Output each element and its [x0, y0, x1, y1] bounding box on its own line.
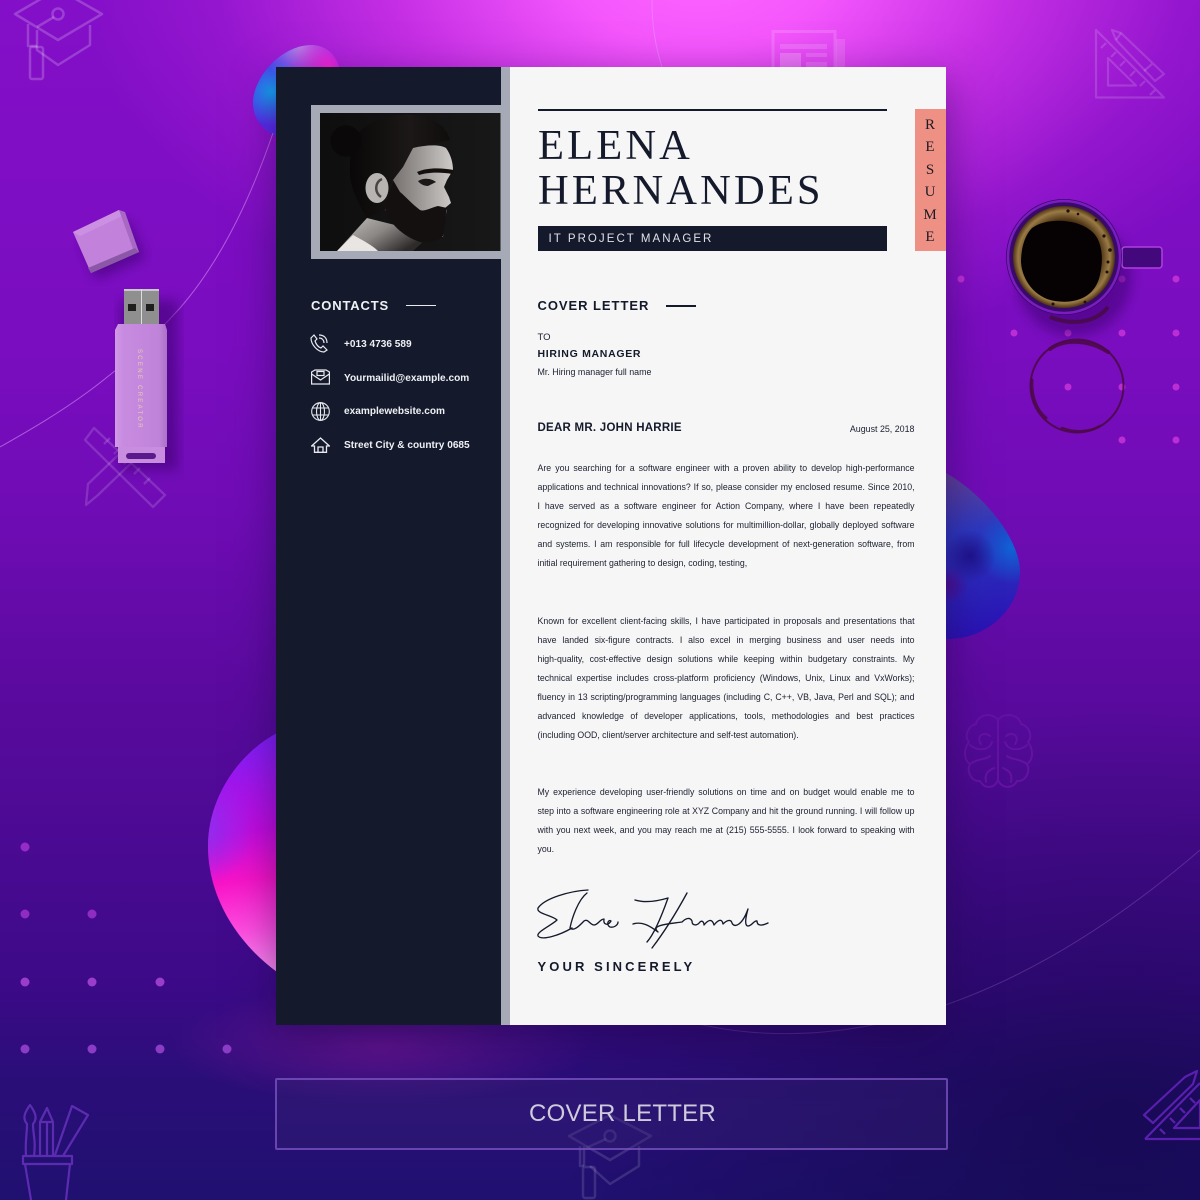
- resume vertical tab: U: [925, 184, 935, 200]
- recipient block: [538, 332, 651, 377]
- contact: address: Street City & country 0685: [344, 440, 470, 451]
- resume vertical tab: E: [925, 229, 935, 245]
- brow and eye: [417, 168, 454, 175]
- resume vertical tab: R: [925, 117, 935, 133]
- contact: phone: [310, 334, 412, 353]
- resume vertical tab: M: [923, 207, 937, 223]
- job title bar: IT PROJECT MANAGER: [548, 233, 713, 245]
- signature: [537, 889, 769, 949]
- letter paragraph 1: I have served as a software engineer for Action Company, where I have been repeatedly: [538, 500, 914, 510]
- icon: graduation cap bottom center: [569, 1115, 651, 1198]
- bottom caption box: COVER LETTER: [529, 1100, 716, 1127]
- face: [385, 145, 453, 237]
- icon: crossed ruler and pencil: [85, 428, 165, 507]
- contact: website: examplewebsite.com: [344, 406, 445, 417]
- contact: phone: +013 4736 589: [344, 339, 412, 350]
- recipient block: Mr. Hiring manager full name: [538, 367, 651, 377]
- hair: [350, 114, 450, 218]
- recipient block: TO: [538, 332, 551, 343]
- letter paragraph 2: fluency in 13 scripting/programming languages (including C, C++, VB, Java, Perl and SQL); and: [538, 692, 914, 702]
- letter paragraph 3: My experience developing user-friendly solutions on time and on budget would enable me to: [538, 786, 914, 796]
- letter paragraph 1: applications and technical innovations? If so, please consider my enclosed resume. Since 2010,: [538, 482, 914, 492]
- dots: right: [958, 276, 1180, 444]
- resume vertical tab: S: [926, 162, 934, 178]
- name heading: ELENA: [538, 122, 693, 169]
- icon: pencil cup bottom left: [23, 1105, 88, 1200]
- letter paragraph 3: step into a software engineering role at XYZ Company and hit the ground running. I will follow up: [538, 806, 914, 816]
- coffee ring stain: [1030, 340, 1124, 432]
- salutation: DEAR MR. JOHN HARRIE: [538, 422, 682, 434]
- letter paragraph 3: you.: [538, 844, 554, 854]
- contact: address: [311, 437, 470, 453]
- job title bar: [538, 226, 887, 251]
- letter paragraph 2: technical expertise includes cross-platform proficiency (Windows, Unix, Linux and VxWorks);: [538, 672, 914, 682]
- contact: website: [311, 402, 445, 421]
- letter paragraph 1: initial requirement gathering to design, coding, testing,: [538, 558, 747, 568]
- letter paragraph 1: [538, 462, 914, 568]
- date: August 25, 2018: [850, 424, 914, 434]
- header top rule: [538, 109, 887, 111]
- bottom caption box: [275, 1078, 948, 1150]
- letter paragraph 1: recognized for developing innovative solutions for multimillion-dollar, globally deployed software: [538, 520, 914, 530]
- blob: right: [946, 473, 1020, 639]
- name heading: HERNANDES: [538, 167, 824, 214]
- resume vertical tab: [915, 109, 946, 251]
- resume vertical tab: E: [925, 139, 935, 155]
- contact: email: [311, 369, 469, 385]
- letter paragraph 2: have landed six-figure contracts. I also excel in merging business and user needs into: [538, 634, 914, 644]
- letter paragraph 1: Are you searching for a software engineer with a proven ability to develop high-performance: [538, 462, 914, 472]
- icon: graduation cap top left: [15, 0, 102, 79]
- cover letter heading rule: [666, 305, 696, 306]
- letter paragraph 2: Known for excellent client-facing skills, I have participated in proposals and presentations that: [538, 616, 914, 626]
- letter paragraph 2: high-quality, cost-effective design solutions while keeping within budgetary constraints. My: [538, 654, 914, 664]
- recipient block: HIRING MANAGER: [538, 348, 641, 360]
- neck: [337, 218, 425, 251]
- letter paragraph 2: [538, 616, 914, 740]
- resume document shadow: [276, 67, 946, 1025]
- cover letter heading: COVER LETTER: [538, 298, 649, 313]
- portrait photo with frame: [311, 105, 501, 259]
- letter paragraph 3: [538, 786, 914, 854]
- contact: email: Yourmailid@example.com: [344, 373, 469, 384]
- panel: grey divider stripe: [501, 67, 510, 1025]
- letter paragraph 1: and systems. I am responsible for full lifecycle development of next-generation software, from: [538, 538, 914, 548]
- usb label: SCENE CREATOR: [136, 349, 142, 429]
- name heading: [538, 122, 824, 214]
- icon: document top center: [773, 32, 845, 67]
- panel: dark sidebar: [276, 67, 501, 1025]
- closing text: YOUR SINCERELY: [538, 959, 695, 974]
- panel: paper sheet: [510, 67, 946, 1025]
- icon: set square and pencil top right: [1096, 30, 1164, 98]
- letter paragraph 2: advanced knowledge of developer applications, tools, methodologies and best practices: [538, 710, 914, 720]
- icon: brain: [965, 715, 1032, 787]
- letter paragraph 2: (including OOD, client/server architecture and self-test automation).: [538, 730, 799, 740]
- blob: top left: [253, 45, 340, 136]
- blob: lower left: [208, 733, 277, 972]
- ear: [366, 173, 388, 203]
- contacts heading rule: [406, 305, 436, 306]
- icon: pencil and set square bottom right: [1144, 1071, 1200, 1139]
- beard: [385, 180, 447, 243]
- dots: lower left: [20, 842, 232, 1054]
- contacts heading: CONTACTS: [311, 298, 389, 313]
- letter paragraph 3: with you next week, and you may reach me at (215) 555-5555. I look forward to speaking with: [538, 824, 914, 834]
- shirt: [337, 235, 378, 251]
